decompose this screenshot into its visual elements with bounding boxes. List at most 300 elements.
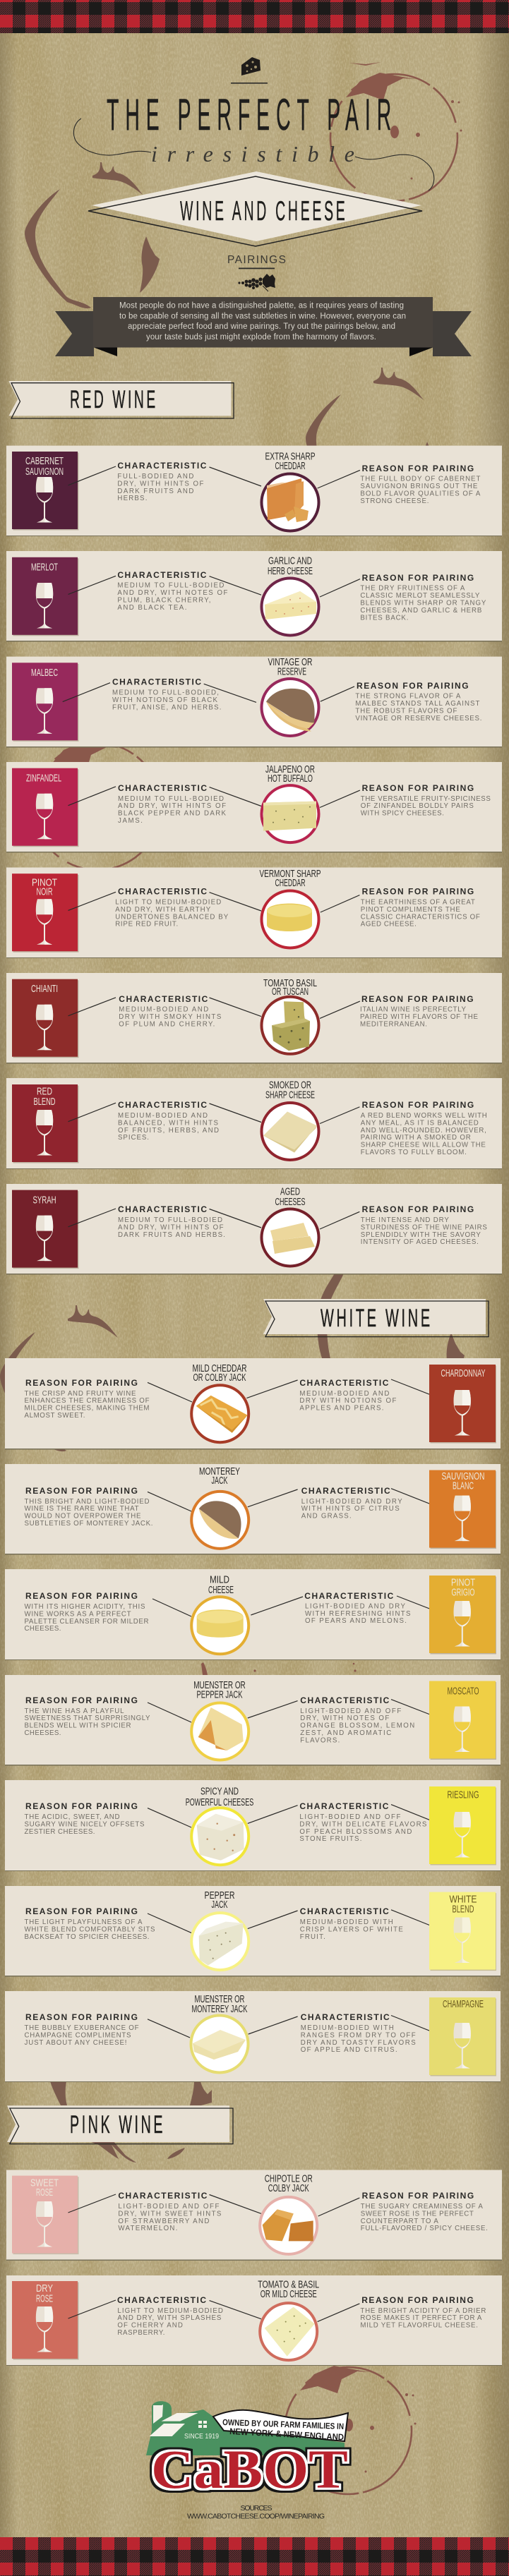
characteristic bbox=[300, 1906, 403, 1941]
cheese label bbox=[275, 1187, 305, 1208]
cheese label bbox=[192, 1994, 248, 2015]
reason: THE FULL BODY OF CABERNET bbox=[360, 476, 480, 483]
reason bbox=[360, 464, 481, 505]
connectors bbox=[148, 1489, 439, 1511]
cheese label bbox=[268, 556, 313, 577]
characteristic: CHARACTERISTIC bbox=[118, 1100, 207, 1110]
wine swatch: Champagne bbox=[429, 1997, 496, 2076]
wine swatch: Pinot Noir: PINOT bbox=[32, 877, 57, 888]
characteristic: DRY WITH SMOKY HINTS bbox=[119, 1013, 222, 1021]
characteristic: ZEST, AND AROMATIC bbox=[300, 1729, 391, 1737]
characteristic: CHARACTERISTIC bbox=[299, 1801, 389, 1811]
cheese label: JACK bbox=[212, 1475, 228, 1487]
characteristic: FULL-BODIED AND bbox=[117, 473, 193, 480]
cheese label: CHEDDAR bbox=[275, 461, 305, 472]
diamond badge bbox=[88, 171, 422, 246]
plaid border: top bbox=[0, 0, 509, 33]
cheese label bbox=[265, 452, 315, 472]
row: Moscato bbox=[5, 1675, 501, 1765]
reason: AND WELL-ROUNDED. HOWEVER, bbox=[361, 1127, 486, 1135]
reason: REASON FOR PAIRING bbox=[361, 2295, 474, 2305]
reason: THE CRISP AND FRUITY WINE bbox=[24, 1390, 136, 1398]
reason: AGED CHEESE. bbox=[361, 921, 417, 929]
wine swatch: Cabernet Sauvignon: SAUVIGNON bbox=[25, 466, 64, 478]
wine swatch: Red Blend bbox=[12, 1084, 79, 1163]
reason: BLENDS WELL WITH SPICIER bbox=[24, 1722, 131, 1730]
connectors bbox=[68, 787, 360, 807]
cheese label: JALAPENO OR bbox=[265, 764, 315, 775]
section banner: white wine: WHITE WINE bbox=[321, 1305, 433, 1333]
reason bbox=[355, 681, 481, 722]
row: Riesling bbox=[5, 1780, 501, 1871]
characteristic: CRISP LAYERS OF WHITE bbox=[300, 1925, 403, 1933]
reason: REASON FOR PAIRING bbox=[25, 1486, 138, 1496]
reason bbox=[24, 1695, 150, 1737]
characteristic: AND BLACK TEA. bbox=[117, 604, 186, 612]
wine swatch: White Blend bbox=[429, 1892, 496, 1971]
characteristic: BLACK PEPPER AND DARK bbox=[118, 810, 227, 818]
logo: Cabot bbox=[146, 2401, 348, 2500]
reason: FLAVORS TO FULLY BLOOM. bbox=[361, 1149, 467, 1156]
characteristic: OF PLUM AND CHERRY. bbox=[119, 1020, 215, 1029]
cheese label: OR TUSCAN bbox=[272, 986, 309, 998]
reason: STRONG CHEESE. bbox=[360, 497, 429, 505]
cheese label: CHIPOTLE OR bbox=[265, 2173, 313, 2184]
characteristic bbox=[301, 1486, 402, 1520]
barn and silo: SINCE 1919 bbox=[184, 2432, 219, 2441]
cheese label bbox=[265, 1080, 315, 1101]
wine swatch: Zinfandel bbox=[12, 768, 79, 847]
reason: REASON FOR PAIRING bbox=[25, 1378, 138, 1388]
row: Cabernet Sauvignon bbox=[6, 446, 502, 536]
characteristic: CHARACTERISTIC bbox=[118, 1204, 207, 1214]
reason bbox=[361, 1204, 487, 1246]
characteristic: FRUIT. bbox=[300, 1933, 325, 1941]
divider rule bbox=[231, 83, 268, 84]
characteristic: CHARACTERISTIC bbox=[304, 1591, 394, 1601]
characteristic bbox=[112, 677, 222, 711]
characteristic bbox=[301, 2012, 416, 2054]
reason: MILD YET FLAVORFUL CHEESE. bbox=[360, 2322, 478, 2330]
characteristic: WITH NOTIONS OF BLACK bbox=[112, 696, 218, 704]
cheese label: SMOKED OR bbox=[269, 1080, 311, 1091]
wine swatch: Sweet Rose: ROSE bbox=[36, 2187, 53, 2199]
characteristic: CHARACTERISTIC bbox=[299, 1378, 389, 1388]
reason: WINE IS THE RARE WINE THAT bbox=[24, 1505, 139, 1513]
barn and silo bbox=[146, 2401, 345, 2455]
row: Chardonnay bbox=[5, 1358, 501, 1449]
wine swatch: Moscato: MOSCATO bbox=[448, 1686, 479, 1697]
characteristic: ORANGE BLOSSOM, LEMON bbox=[300, 1722, 414, 1730]
reason: SWEET ROSE IS THE PERFECT bbox=[361, 2210, 474, 2218]
script word with flourishes bbox=[73, 119, 434, 191]
row: Sweet Rose bbox=[6, 2170, 502, 2261]
characteristic: AND DRY, WITH EARTHY bbox=[115, 906, 211, 914]
cheese label: HERB CHEESE bbox=[268, 566, 313, 577]
wine swatch: Riesling bbox=[429, 1786, 496, 1866]
cheese label: VERMONT SHARP bbox=[260, 869, 321, 880]
characteristic: JAMS. bbox=[118, 817, 143, 825]
characteristic: APPLES AND PEARS. bbox=[299, 1405, 383, 1413]
wine swatch: Red Blend: BLEND bbox=[34, 1096, 55, 1108]
characteristic bbox=[299, 1801, 427, 1843]
characteristic: STONE FRUITS. bbox=[299, 1835, 361, 1843]
characteristic: MEDIUM-BODIED AND bbox=[299, 1390, 389, 1398]
cheese label: TOMATO BASIL bbox=[263, 978, 317, 989]
cheese photo: vintage or reserve bbox=[261, 679, 319, 736]
wine swatch: Syrah: SYRAH bbox=[32, 1195, 56, 1206]
reason: THIS BRIGHT AND LIGHT-BODIED bbox=[24, 1498, 150, 1506]
reason: WINE WORKS AS A PERFECT bbox=[24, 1610, 131, 1618]
cheese photo: extra sharp cheddar bbox=[261, 474, 319, 531]
reason bbox=[24, 1378, 150, 1420]
reason: REASON FOR PAIRING bbox=[362, 464, 474, 473]
cheese label: MONTEREY bbox=[199, 1466, 240, 1477]
cheese photo: monterey jack bbox=[191, 1492, 248, 1549]
reason: PAIRED WITH FLAVORS OF THE bbox=[360, 1013, 479, 1021]
wine swatch: Sauvignon Blanc: SAUVIGNON bbox=[442, 1471, 484, 1482]
reason: REASON FOR PAIRING bbox=[362, 887, 474, 897]
section banner: red wine bbox=[8, 381, 234, 418]
reason bbox=[360, 994, 479, 1029]
characteristic: CHARACTERISTIC bbox=[118, 887, 207, 897]
characteristic: WITH HINTS OF CITRUS bbox=[301, 1505, 400, 1513]
characteristic: OF CHERRY AND bbox=[117, 2322, 183, 2330]
reason bbox=[361, 783, 491, 818]
reason: PALETTE CLEANSER FOR MILDER bbox=[24, 1618, 148, 1626]
characteristic: RASPBERRY. bbox=[117, 2329, 164, 2337]
wine swatch: Cabernet Sauvignon: CABERNET bbox=[25, 456, 64, 467]
cheese photo: tomato and basil or mild bbox=[260, 2303, 317, 2360]
characteristic: FLAVORS. bbox=[300, 1736, 340, 1744]
reason: BITES BACK. bbox=[360, 614, 408, 622]
reason: THE LIGHT PLAYFULNESS OF A bbox=[24, 1918, 143, 1926]
cheese label bbox=[268, 657, 312, 677]
cheese photo: muenster or monterey jack bbox=[191, 2015, 248, 2073]
reason: THE INTENSE AND DRY bbox=[361, 1216, 449, 1224]
cheese label bbox=[193, 1680, 246, 1700]
characteristic bbox=[119, 994, 222, 1029]
reason: ROSE MAKES IT PERFECT FOR A bbox=[360, 2314, 482, 2322]
characteristic: OF PEACH BLOSSOMS AND bbox=[299, 1828, 412, 1836]
characteristic: UNDERTONES BALANCED BY bbox=[115, 913, 229, 921]
wine swatch: Chianti bbox=[12, 979, 79, 1058]
characteristic: MEDIUM-BODIED AND bbox=[118, 1112, 208, 1120]
cheese photo: vermont sharp cheddar bbox=[261, 890, 319, 948]
cheese label: RESERVE bbox=[277, 666, 306, 677]
wine swatch: Pinot Noir: NOIR bbox=[37, 886, 52, 897]
wine swatch: Pinot Noir bbox=[12, 873, 79, 953]
reason: PINOT COMPLIMENTS THE bbox=[361, 906, 460, 914]
sources bbox=[187, 2504, 325, 2520]
connectors bbox=[152, 1596, 444, 1616]
reason: JUST ABOUT ANY CHEESE! bbox=[24, 2039, 127, 2047]
characteristic: RIPE RED FRUIT. bbox=[115, 921, 178, 929]
cheese label: JACK bbox=[212, 1899, 228, 1911]
characteristic: MEDIUM TO FULL-BODIED, bbox=[112, 689, 219, 697]
wine swatch: Pinot Grigio: GRIGIO bbox=[452, 1587, 474, 1598]
reason: CHEESES. bbox=[24, 1729, 61, 1737]
reason: SPLENDIDLY WITH THE SAVORY bbox=[361, 1231, 481, 1239]
characteristic: LIGHT-BODIED AND DRY bbox=[301, 1498, 402, 1506]
characteristic: FRUIT, ANISE, AND HERBS. bbox=[112, 703, 222, 711]
reason: BLENDS WITH SHARP OR TANGY bbox=[360, 600, 486, 607]
characteristic: CHARACTERISTIC bbox=[300, 1906, 389, 1916]
reason: MILDER CHEESES, MAKING THEM bbox=[24, 1405, 150, 1413]
characteristic: PLUM, BLACK CHERRY, bbox=[117, 597, 210, 604]
wine swatch: Sauvignon Blanc: BLANC bbox=[453, 1481, 474, 1492]
characteristic: DARK FRUITS AND bbox=[117, 488, 193, 495]
cheese label: SHARP CHEESE bbox=[265, 1089, 315, 1101]
cheese label bbox=[186, 1786, 253, 1808]
wine swatch: Malbec: MALBEC bbox=[31, 667, 58, 679]
sources: SOURCES bbox=[240, 2504, 273, 2512]
cheese label bbox=[199, 1466, 240, 1487]
characteristic: DRY WITH NOTIONS OF bbox=[299, 1397, 396, 1405]
reason bbox=[360, 573, 486, 622]
characteristic: CHARACTERISTIC bbox=[117, 461, 207, 471]
cheese label: OR COLBY JACK bbox=[193, 1372, 246, 1384]
cheese label: SPICY AND bbox=[200, 1786, 239, 1798]
reason: ANY MEAL, AS IT IS BALANCED bbox=[361, 1119, 479, 1127]
characteristic: OF STRAWBERRY AND bbox=[118, 2218, 209, 2225]
characteristic bbox=[118, 2191, 222, 2232]
reason: THE BUBBLY EXUBERANCE OF bbox=[24, 2024, 139, 2032]
wine swatch: Moscato bbox=[429, 1681, 496, 1760]
reason: CHEESES, AND GARLIC & HERB bbox=[360, 607, 481, 615]
connectors bbox=[68, 1103, 359, 1123]
characteristic: CHARACTERISTIC bbox=[300, 1695, 390, 1705]
row: Dry Rose bbox=[6, 2275, 502, 2366]
reason: REASON FOR PAIRING bbox=[362, 1100, 474, 1110]
reason: REASON FOR PAIRING bbox=[361, 994, 474, 1004]
cheese label: TOMATO & BASIL bbox=[258, 2280, 319, 2291]
characteristic: DRY, WITH SWEET HINTS bbox=[118, 2210, 222, 2218]
characteristic: OF APPLE AND CITRUS. bbox=[301, 2046, 397, 2054]
connectors bbox=[68, 466, 360, 488]
reason: THE SUGARY CREAMINESS OF A bbox=[361, 2203, 483, 2211]
characteristic bbox=[115, 887, 229, 929]
wine swatch: Zinfandel: ZINFANDEL bbox=[26, 773, 61, 785]
characteristic bbox=[117, 570, 227, 612]
connectors bbox=[68, 998, 360, 1018]
cheese label: MUENSTER OR bbox=[193, 1680, 246, 1691]
cheese label: MUENSTER OR bbox=[195, 1994, 244, 2005]
reason: A RED BLEND WORKS WELL WITH bbox=[361, 1112, 487, 1120]
reason: THE ACIDIC, SWEET, AND bbox=[24, 1813, 120, 1821]
cheese label: GARLIC AND bbox=[268, 556, 312, 567]
section banner: pink wine: PINK WINE bbox=[70, 2111, 165, 2139]
section banner: red wine: RED WINE bbox=[70, 385, 158, 413]
characteristic: DRY, WITH NOTES OF bbox=[300, 1715, 389, 1722]
connectors bbox=[68, 1209, 359, 1229]
cheese label bbox=[260, 869, 321, 889]
reason: WOULD NOT OVERPOWER THE bbox=[24, 1513, 141, 1520]
intro text: your taste buds just might explode from the harmony of flavors. bbox=[146, 333, 376, 341]
title: THE PERFECT PAIR bbox=[107, 91, 397, 140]
script word with flourishes: irresistible bbox=[151, 141, 354, 167]
reason: CLASSIC CHARACTERISTICS OF bbox=[361, 913, 480, 921]
characteristic: AND GRASS. bbox=[301, 1513, 352, 1520]
characteristic: MEDIUM TO FULL-BODIED bbox=[118, 795, 224, 803]
characteristic bbox=[304, 1591, 411, 1625]
characteristic: RANGES FROM DRY TO OFF bbox=[301, 2031, 416, 2039]
reason: THE BRIGHT ACIDITY OF A DRIER bbox=[360, 2307, 486, 2315]
cheese label: CHEDDAR bbox=[275, 878, 305, 889]
characteristic: LIGHT TO MEDIUM-BODIED bbox=[115, 899, 221, 906]
cheese photo: muenster or pepper jack bbox=[191, 1703, 248, 1760]
reason: THE VERSATILE FRUITY-SPICINESS bbox=[361, 795, 491, 803]
cheese photo: garlic and herb bbox=[261, 579, 319, 635]
characteristic bbox=[300, 1695, 414, 1744]
cheese label: HOT BUFFALO bbox=[268, 773, 313, 785]
characteristic: CHARACTERISTIC bbox=[112, 677, 201, 687]
reason: SAUVIGNON BRINGS OUT THE bbox=[360, 483, 478, 490]
characteristic: MEDIUM TO FULL-BODIED bbox=[117, 582, 224, 590]
connectors bbox=[148, 1700, 439, 1722]
cheese label bbox=[192, 1363, 247, 1384]
row: Merlot bbox=[6, 551, 502, 642]
reason: ALMOST SWEET. bbox=[24, 1412, 85, 1420]
reason: REASON FOR PAIRING bbox=[362, 573, 474, 583]
characteristic bbox=[117, 2295, 223, 2337]
reason: REASON FOR PAIRING bbox=[25, 1801, 138, 1811]
cheese label: CHEESE bbox=[208, 1585, 234, 1596]
characteristic: SPICES. bbox=[118, 1134, 149, 1142]
cheese label: CHEESES bbox=[275, 1197, 305, 1208]
reason: PAIRING WITH A SMOKED OR bbox=[361, 1134, 471, 1142]
reason: ENHANCES THE CREAMINESS OF bbox=[24, 1397, 150, 1405]
connectors bbox=[63, 683, 354, 702]
wine swatch: Malbec bbox=[12, 663, 79, 742]
section banner: pink wine bbox=[7, 2105, 233, 2144]
characteristic: LIGHT TO MEDIUM-BODIED bbox=[117, 2307, 223, 2315]
reason: STURDINESS OF THE WINE PAIRS bbox=[361, 1223, 487, 1231]
cheese label bbox=[265, 2173, 313, 2194]
wine swatch: Merlot bbox=[12, 557, 79, 636]
cheese label: EXTRA SHARP bbox=[265, 452, 315, 463]
characteristic bbox=[118, 1204, 225, 1239]
banner bbox=[213, 2410, 348, 2442]
row: Malbec bbox=[6, 657, 502, 748]
banner: OWNED BY OUR FARM FAMILIES IN bbox=[222, 2417, 344, 2431]
characteristic: LIGHT-BODIED AND DRY bbox=[305, 1602, 406, 1610]
characteristic: CHARACTERISTIC bbox=[301, 1486, 390, 1496]
section banner: white wine bbox=[263, 1299, 489, 1337]
row: Champagne bbox=[5, 1991, 501, 2082]
reason: REASON FOR PAIRING bbox=[362, 1204, 474, 1214]
wine swatch: Cabernet Sauvignon bbox=[12, 452, 79, 531]
reason bbox=[24, 1591, 148, 1633]
wine swatch: Pinot Grigio: PINOT bbox=[451, 1578, 475, 1589]
icon: cheese wedge bbox=[241, 57, 261, 75]
reason: WITH ITS HIGHER ACIDITY, THIS bbox=[24, 1603, 145, 1611]
reason: THE WINE HAS A PLAYFUL bbox=[24, 1707, 124, 1715]
connectors bbox=[148, 1379, 439, 1402]
reason bbox=[24, 1801, 145, 1836]
reason: CHAMPAGNE COMPLIMENTS bbox=[24, 2031, 131, 2039]
reason: REASON FOR PAIRING bbox=[362, 2191, 474, 2201]
wine swatch: Dry Rose: DRY bbox=[36, 2283, 53, 2294]
characteristic: AND DRY, WITH NOTES OF bbox=[117, 589, 227, 597]
reason bbox=[361, 887, 480, 929]
reason: THE ROBUST FLAVORS OF bbox=[355, 707, 457, 715]
reason: THE EARTHINESS OF A GREAT bbox=[361, 899, 475, 906]
cheese label bbox=[263, 978, 317, 998]
reason: REASON FOR PAIRING bbox=[25, 1695, 138, 1705]
row: Red Blend bbox=[6, 1078, 502, 1169]
characteristic: CHARACTERISTIC bbox=[118, 2191, 208, 2201]
cheese label: PEPPER JACK bbox=[196, 1689, 243, 1700]
characteristic: BALANCED, WITH HINTS bbox=[118, 1119, 219, 1127]
reason: FULL-FLAVORED / SPICY CHEESE. bbox=[361, 2225, 488, 2232]
characteristic: OF FRUITS, HERBS, AND bbox=[118, 1127, 219, 1135]
reason: VINTAGE OR RESERVE CHEESES. bbox=[355, 715, 481, 722]
cheese photo: tomato basil bbox=[261, 997, 319, 1054]
cheese label: VINTAGE OR bbox=[268, 657, 312, 668]
wine swatch: Sweet Rose: SWEET bbox=[30, 2177, 59, 2189]
characteristic: MEDIUM-BODIED WITH bbox=[300, 1918, 393, 1926]
reason: SUBTLETIES OF MONTEREY JACK. bbox=[24, 1520, 152, 1528]
cheese label: COLBY JACK bbox=[268, 2183, 309, 2194]
cheese label: MONTEREY JACK bbox=[192, 2004, 248, 2015]
cheese label bbox=[205, 1890, 234, 1911]
cheese label: AGED bbox=[280, 1187, 300, 1198]
cheese label bbox=[208, 1575, 234, 1596]
reason: WHITE BLEND COMFORTABLY SITS bbox=[24, 1925, 155, 1933]
row: Pinot Noir bbox=[6, 868, 502, 958]
banner: NEW YORK & NEW ENGLAND bbox=[229, 2426, 344, 2442]
wine swatch: Chardonnay bbox=[429, 1365, 496, 1444]
reason: OF ZINFANDEL BOLDLY PAIRS bbox=[361, 802, 474, 810]
reason: ITALIAN WINE IS PERFECTLY bbox=[360, 1006, 467, 1014]
characteristic: AND DRY, WITH HINTS OF bbox=[118, 802, 226, 810]
wine swatch: White Blend: WHITE bbox=[449, 1894, 477, 1905]
cheese label: MILD CHEDDAR bbox=[192, 1363, 247, 1374]
cheese photo: pepper jack bbox=[191, 1913, 248, 1970]
characteristic: OF PEARS AND MELONS. bbox=[305, 1617, 407, 1625]
cheese photo: smoked or sharp bbox=[261, 1103, 319, 1160]
divider rule bbox=[239, 268, 275, 269]
intro text: appreciate perfect food and wine pairings. Try out the pairings below, and bbox=[128, 322, 395, 331]
cheese label: OR MILD CHEESE bbox=[261, 2289, 317, 2300]
cheese label bbox=[265, 764, 315, 785]
characteristic: CHARACTERISTIC bbox=[301, 2012, 390, 2022]
characteristic: DRY, WITH DELICATE FLAVORS bbox=[299, 1820, 427, 1828]
intro text: Most people do not have a distinguished palette, as it requires years of tasting bbox=[119, 302, 404, 310]
reason: MALBEC STANDS TALL AGAINST bbox=[355, 700, 479, 708]
reason: REASON FOR PAIRING bbox=[25, 1591, 138, 1601]
row: Syrah bbox=[6, 1184, 502, 1274]
characteristic: AND DRY, WITH HINTS OF bbox=[118, 1223, 224, 1231]
reason: CLASSIC MERLOT SEAMLESSLY bbox=[360, 592, 480, 600]
cheese photo: mild cheddar bbox=[191, 1385, 248, 1442]
wine swatch: Dry Rose bbox=[12, 2281, 79, 2359]
characteristic: CHARACTERISTIC bbox=[117, 2295, 206, 2305]
reason: SUGARY WINE NICELY OFFSETS bbox=[24, 1820, 145, 1828]
characteristic: WITH REFRESHING HINTS bbox=[305, 1610, 411, 1618]
reason: SHARP CHEESE WILL ALLOW THE bbox=[361, 1142, 486, 1149]
reason bbox=[360, 2295, 486, 2330]
cheese label bbox=[258, 2280, 319, 2300]
reason bbox=[24, 1906, 155, 1941]
reason: REASON FOR PAIRING bbox=[362, 783, 474, 793]
wine swatch: Chianti: CHIANTI bbox=[31, 984, 58, 995]
reason: SWEETNESS THAT SURPRISINGLY bbox=[24, 1715, 150, 1722]
cheese photo: chipotle or colby jack bbox=[260, 2197, 317, 2254]
subtitle: pairings: PAIRINGS bbox=[227, 254, 286, 266]
characteristic bbox=[117, 461, 207, 502]
